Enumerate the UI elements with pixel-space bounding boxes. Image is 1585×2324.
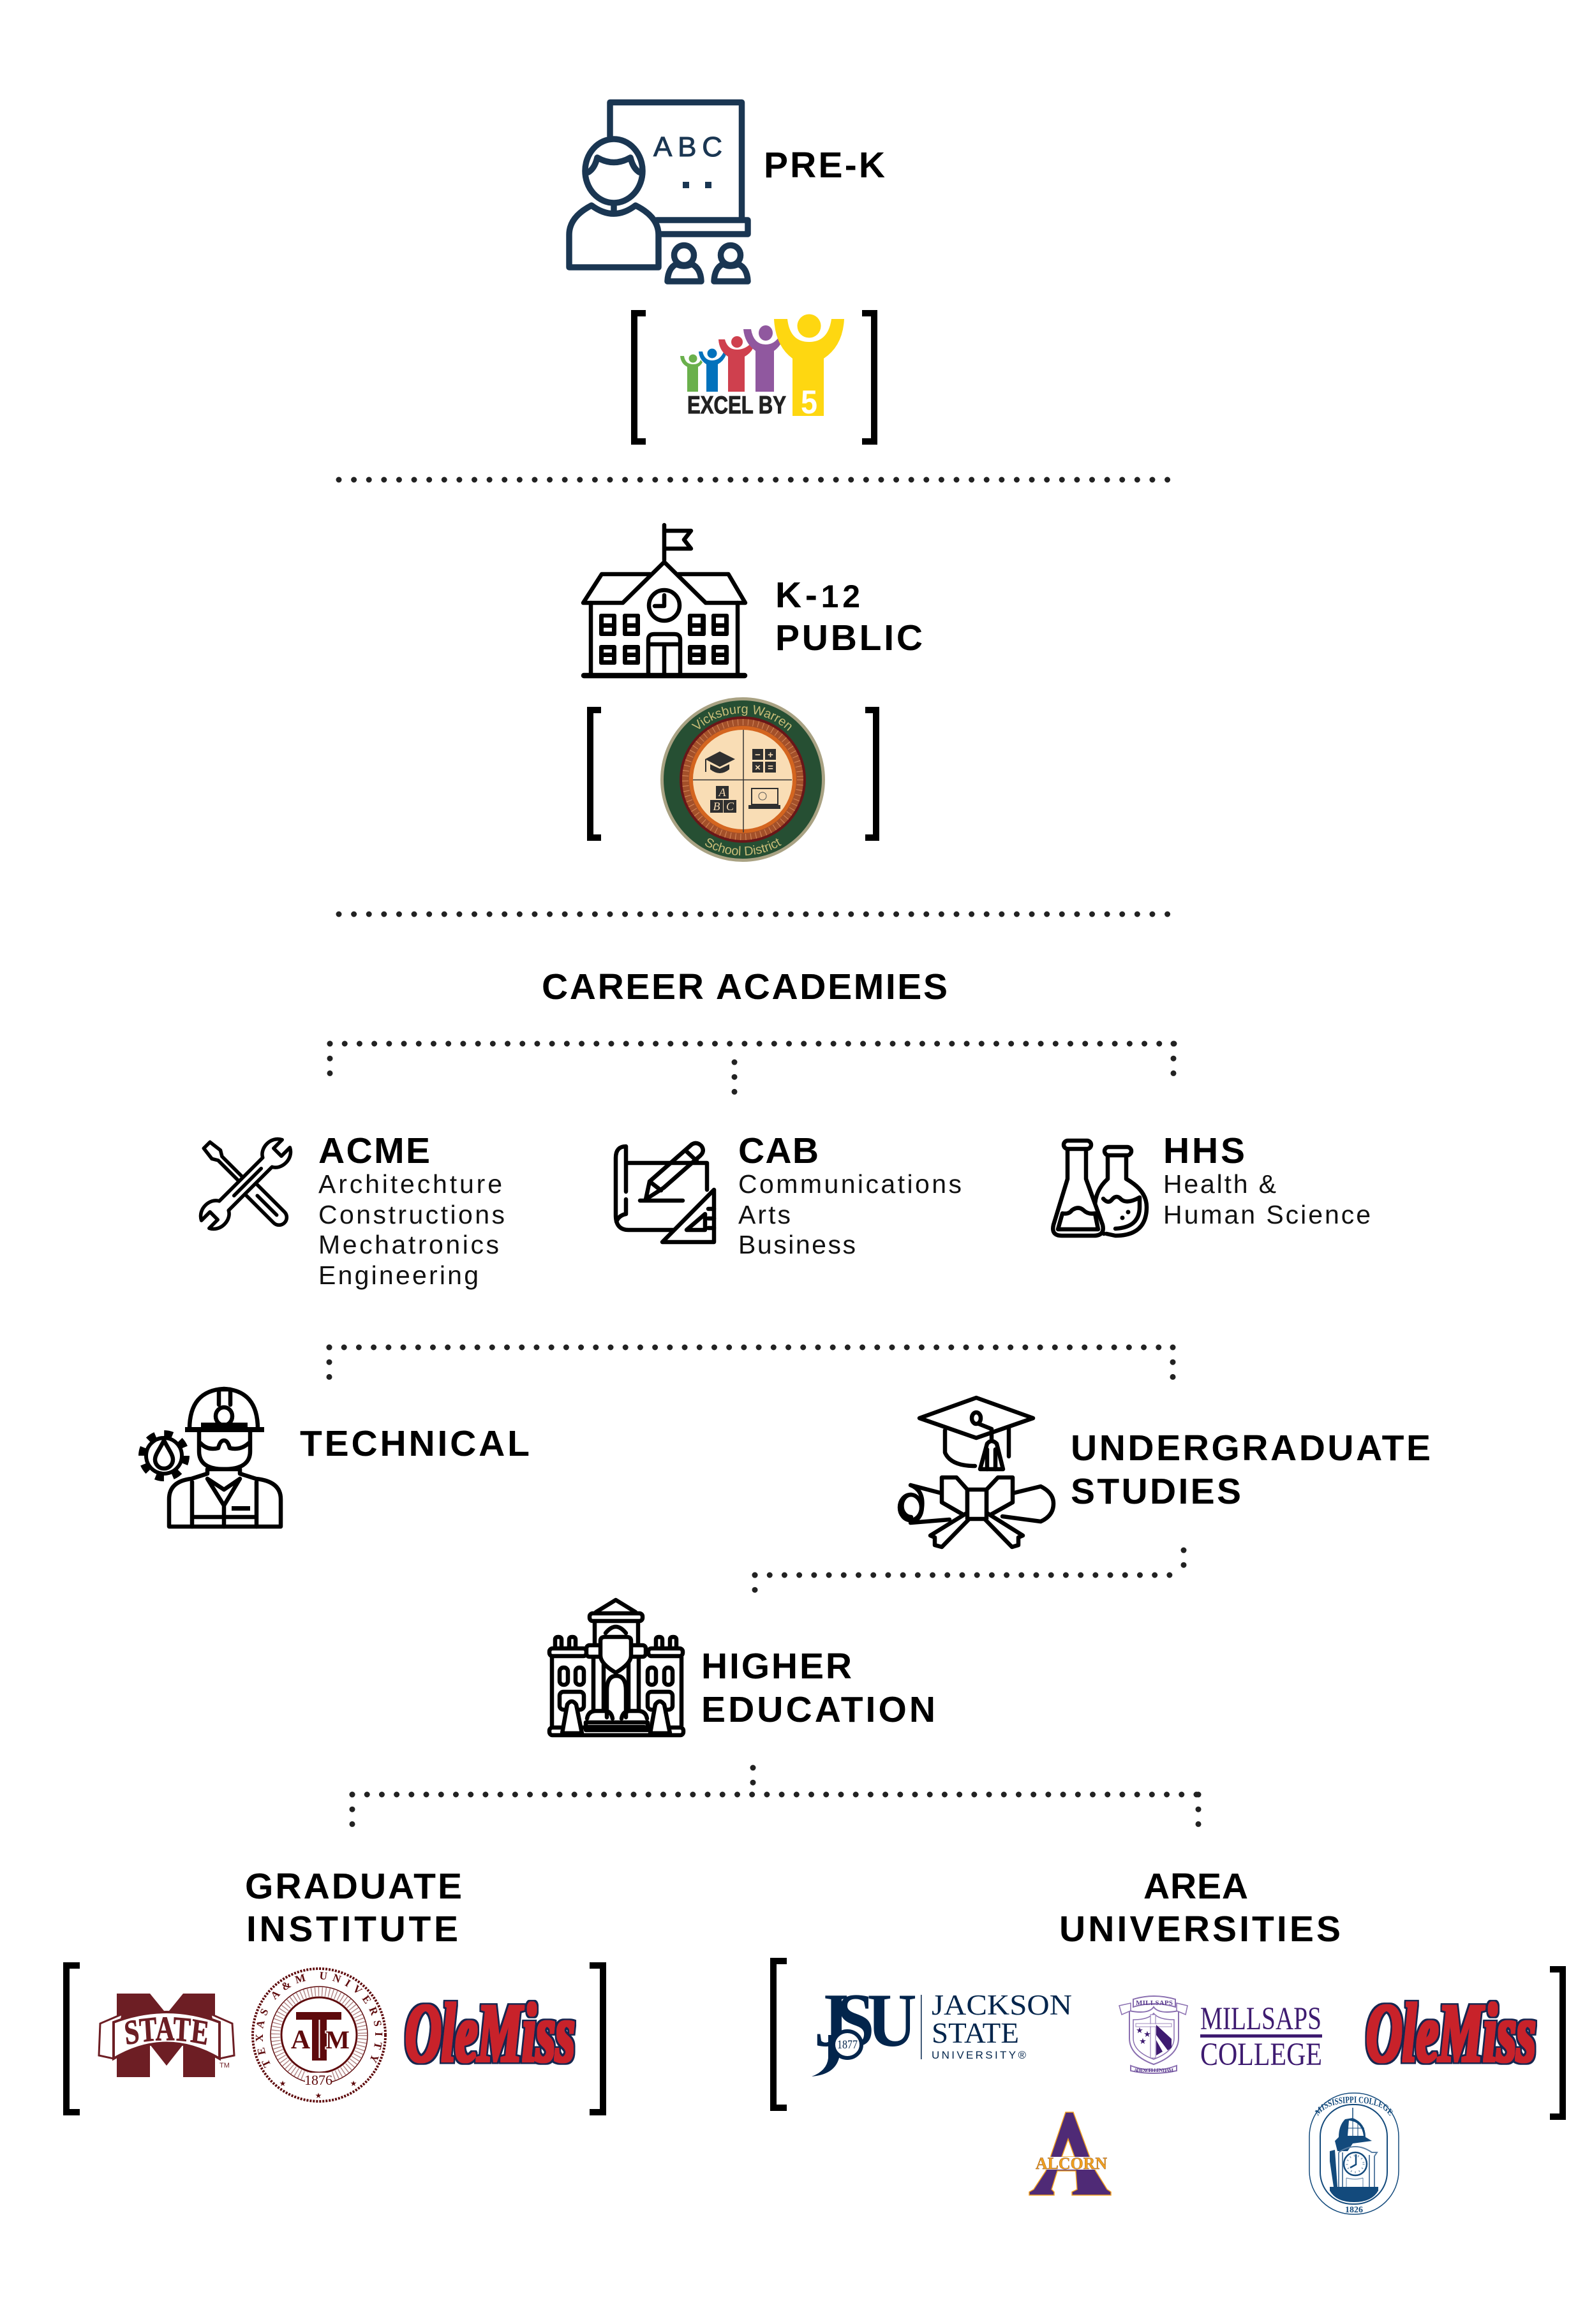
logo: Texas A&M seal: M	[325, 2025, 350, 2054]
logo: Jackson State University	[812, 1978, 1072, 2076]
panel: Graduate institute	[63, 1866, 606, 2115]
section: K-12 public	[581, 523, 923, 862]
logo: Texas A&M seal: 1876	[304, 2072, 332, 2088]
bracket: left	[773, 1961, 787, 2108]
heading: Education: EDUCATION	[701, 1689, 935, 1730]
logo: Mississippi College seal: 1826	[1345, 2205, 1363, 2215]
heading: Technical: TECHNICAL	[300, 1423, 530, 1464]
logo: Vicksburg Warren School District seal: +	[768, 750, 773, 760]
logo: Alcorn: ALCORN	[1036, 2154, 1107, 2173]
heading: K-12: K-12	[775, 575, 860, 616]
panel: Technical	[142, 1389, 530, 1527]
connector: technical and undergraduate branches	[329, 1347, 1173, 1378]
logo: Vicksburg Warren School District seal: C	[726, 800, 734, 813]
heading: ACME: ACME	[318, 1130, 430, 1171]
panel: CAB academy	[616, 1130, 962, 1259]
logo: Texas A&M seal: A	[291, 2025, 311, 2055]
logo: Jackson State University: STATE	[932, 2017, 1019, 2049]
logo: Vicksburg Warren School District seal: Vicksburg Warren	[692, 705, 791, 731]
logo: Mississippi College seal	[1309, 2092, 1399, 2215]
logo: Millsaps College	[1119, 1996, 1322, 2073]
text: ACME programs	[318, 1169, 505, 1290]
logo: Excel by 5	[680, 314, 844, 421]
logo: Millsaps College: MILLSAPS	[1200, 2001, 1321, 2037]
heading: CAB: CAB	[738, 1130, 819, 1171]
logo: Millsaps College: AD EXCELLENTIAM	[1134, 2068, 1173, 2073]
logo: Millsaps College: ★	[1136, 2026, 1143, 2036]
panel: Area universities	[770, 1866, 1566, 2215]
bracket: right	[590, 1965, 603, 2112]
icon: crossed wrench and screwdriver	[196, 1134, 295, 1234]
text: CAB programs	[738, 1169, 962, 1259]
logo: Vicksburg Warren School District seal: B	[713, 800, 720, 813]
heading: HHS: HHS	[1163, 1130, 1245, 1171]
text: HHS programs: Health &	[1163, 1169, 1276, 1199]
panel: HHS academy	[1053, 1130, 1371, 1236]
bracket: left	[634, 313, 646, 441]
text: CAB programs: Business	[738, 1230, 856, 1259]
icon: graduation cap and diploma	[900, 1398, 1053, 1547]
text: HHS programs	[1163, 1169, 1371, 1229]
icon: teacher at chalkboard	[569, 102, 748, 281]
icon: teacher at chalkboard: ABC	[653, 131, 722, 163]
heading: PRE-K: PRE-K	[764, 145, 885, 186]
text: CAB programs: Communications	[738, 1169, 962, 1199]
logo: Millsaps College: ★	[1143, 2030, 1151, 2039]
heading: Career Academies: CAREER ACADEMIES	[542, 966, 948, 1007]
logo: Excel by 5: EXCEL BY	[687, 392, 786, 419]
section: Pre-K	[569, 102, 885, 441]
icon: laboratory flasks	[1053, 1141, 1147, 1236]
logo: Vicksburg Warren School District seal: =	[768, 762, 773, 773]
heading: Universities: UNIVERSITIES	[1059, 1909, 1341, 1950]
heading: Higher: HIGHER	[701, 1646, 852, 1687]
connector: undergraduate to higher education	[755, 1550, 1184, 1591]
icon: engineer with gear	[142, 1389, 281, 1527]
heading: Graduate: GRADUATE	[245, 1866, 462, 1907]
connector: career academies branches	[330, 1044, 1175, 1093]
logo: Mississippi State	[98, 1994, 235, 2077]
text: ACME programs: Architechture	[318, 1169, 502, 1199]
divider: dotted line two	[339, 911, 1169, 917]
text: HHS programs: Human Science	[1163, 1200, 1371, 1229]
divider: dotted line one	[339, 477, 1169, 482]
logo: Vicksburg Warren School District seal: −	[755, 750, 761, 760]
logo: Jackson State University: JACKSON	[932, 1989, 1072, 2021]
logo: Ole Miss: OleMiss	[405, 1986, 575, 2080]
logo: Mississippi State: TM	[220, 2062, 230, 2069]
logo: Texas A&M seal: ★	[279, 2079, 286, 2088]
logo: Millsaps College: MILLSAPS	[1136, 1999, 1173, 2007]
heading: Studies: STUDIES	[1071, 1471, 1241, 1512]
panel: Undergraduate studies	[900, 1398, 1431, 1547]
logo: Vicksburg Warren School District seal: A	[718, 786, 726, 799]
bracket: left	[66, 1965, 80, 2112]
bracket: right	[1550, 1969, 1563, 2117]
logo: Millsaps College: COLLEGE	[1200, 2037, 1322, 2073]
bracket: right	[865, 710, 876, 838]
bracket: left	[590, 710, 601, 838]
logo: Excel by 5: 5	[801, 384, 817, 421]
logo: Millsaps College: ★	[1139, 2037, 1147, 2046]
heading: public: PUBLIC	[775, 618, 923, 658]
text: CAB programs: Arts	[738, 1200, 791, 1229]
logo: Texas A&M seal: ★	[350, 2079, 357, 2088]
icon: school house	[583, 525, 745, 676]
heading: Area: AREA	[1143, 1866, 1248, 1907]
logo: Vicksburg Warren School District seal	[660, 697, 825, 862]
icon: university building	[549, 1600, 683, 1735]
logo: Texas A&M seal: TEXAS A&M UNIVERSITY	[255, 1972, 383, 2068]
text: ACME programs: Mechatronics	[318, 1230, 499, 1259]
logo: Jackson State University: JSU	[814, 1978, 917, 2062]
text: ACME programs: Engineering	[318, 1261, 479, 1290]
logo: Jackson State University: UNIVERSITY®	[932, 2049, 1026, 2061]
logo: Texas A&M seal: ★	[315, 2091, 322, 2100]
logo: Mississippi College seal: MISSISSIPPI COLLEGE	[1314, 2096, 1393, 2117]
logo: Jackson State University: 1877	[837, 2038, 858, 2052]
icon: blueprint pencil and set square	[616, 1143, 714, 1242]
logo: Vicksburg Warren School District seal: School District	[705, 838, 782, 855]
connector: higher education branches	[352, 1768, 1198, 1824]
text: ACME programs: Constructions	[318, 1200, 505, 1229]
heading: Undergraduate: UNDERGRADUATE	[1071, 1428, 1431, 1469]
logo: Vicksburg Warren School District seal: ×	[755, 762, 761, 773]
logo: Mississippi State: STATE	[125, 2017, 208, 2045]
panel: ACME academy	[196, 1130, 505, 1290]
bracket: right	[862, 313, 874, 441]
logo: Alcorn	[1029, 2112, 1111, 2195]
heading: Institute: INSTITUTE	[246, 1909, 458, 1950]
panel: Higher education	[549, 1600, 935, 1735]
